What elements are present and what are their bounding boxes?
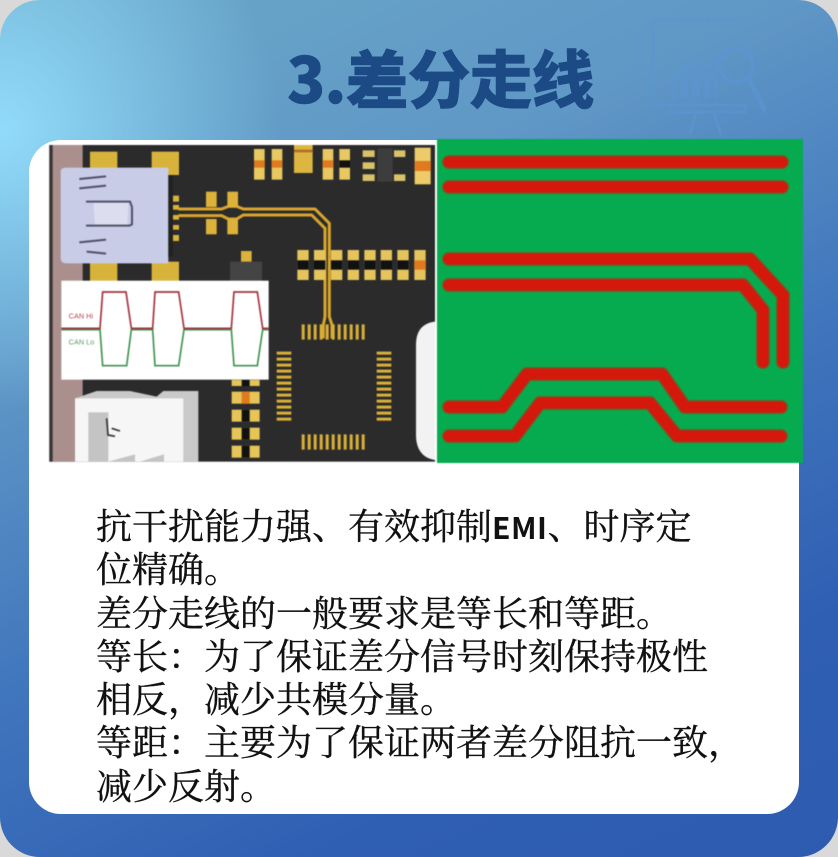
board — [49, 145, 435, 462]
IC pins — [277, 324, 391, 450]
body text — [96, 504, 744, 807]
body text: 减少反射。 — [96, 767, 276, 807]
CAN waveform inset — [61, 281, 269, 380]
body text: 等距：主要为了保证两者差分阻抗一致， — [96, 723, 744, 763]
filter pads — [206, 192, 238, 234]
USB connector — [61, 168, 173, 263]
CAN waveform inset: CAN Lo — [69, 338, 94, 347]
component row — [297, 250, 426, 280]
body text: 差分走线的一般要求是等长和等距。 — [96, 594, 672, 634]
CAN waveform inset: CAN Hi — [69, 311, 93, 320]
body text: 位精确。 — [96, 550, 240, 590]
top row components — [254, 145, 431, 184]
title: 3.差分走线 — [287, 31, 593, 122]
lower vertical component column — [232, 380, 260, 458]
body text: 等长：为了保证差分信号时刻保持极性 — [96, 637, 708, 677]
body text: 相反，减少共模分量。 — [96, 680, 456, 720]
body text: 抗干扰能力强、有效抑制EMI、时序定 — [96, 504, 691, 548]
small transistor — [230, 251, 262, 282]
paired traces — [449, 162, 783, 436]
differential traces — [178, 206, 332, 338]
white JST connector — [75, 391, 198, 462]
USB connector pads — [90, 152, 179, 285]
right-side white connector — [416, 322, 435, 460]
white content panel — [29, 140, 799, 814]
